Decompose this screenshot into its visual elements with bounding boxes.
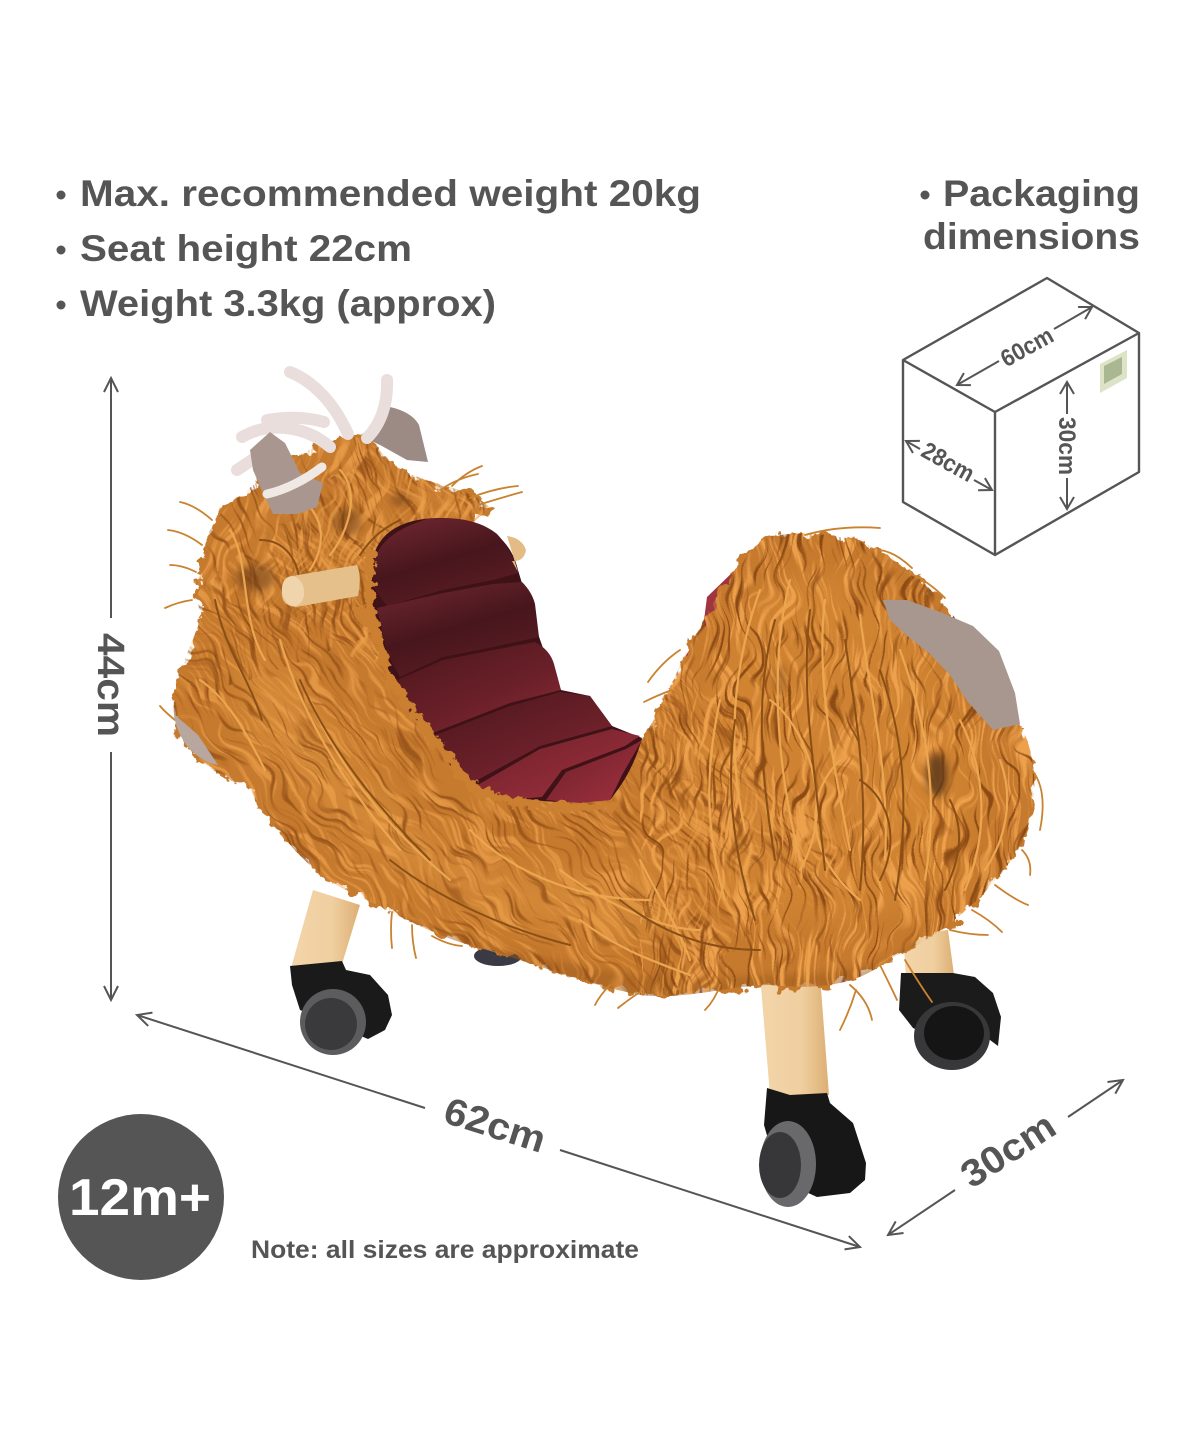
width dimension arrow: [888, 1080, 1123, 1235]
specifications list: Weight 3.3kg (approx): [80, 283, 496, 324]
tail patch: [883, 600, 1020, 730]
front leg and caster: [290, 890, 392, 1055]
stray edge wisps: [160, 466, 1043, 1030]
packaging box diagram: 60cm: [996, 322, 1058, 373]
length dimension arrow: [137, 1015, 860, 1247]
specifications list: [56, 173, 701, 324]
far ear: [363, 407, 428, 462]
packaging dimensions heading: [920, 173, 1140, 257]
hidden centre wheel: [474, 946, 522, 966]
near rear leg and caster: [759, 975, 866, 1207]
width dimension arrow: 30cm: [953, 1105, 1064, 1197]
antlers and near ear: [237, 372, 387, 514]
packaging dimensions heading: Packaging: [943, 173, 1140, 214]
wooden handlebar pegs: [280, 536, 526, 608]
specifications list: Seat height 22cm: [80, 228, 412, 269]
fur fringe over seat edge: [360, 552, 612, 808]
rear seat edge: [680, 548, 768, 670]
ribbed maroon seat: [371, 518, 642, 803]
packaging dimensions heading: dimensions: [923, 216, 1140, 257]
back leg and caster: [899, 930, 1001, 1070]
height dimension arrow: 44cm: [89, 633, 131, 737]
age badge: [58, 1114, 224, 1280]
highland cow ride-on toy: [159, 366, 1044, 1207]
size note: Note: all sizes are approximate: [251, 1236, 639, 1264]
muzzle: [174, 714, 218, 765]
packaging box diagram: 28cm: [917, 437, 979, 488]
fur strand texture: [174, 437, 1034, 996]
length dimension arrow: 62cm: [439, 1090, 551, 1162]
shaggy fur body: [174, 437, 1034, 996]
packaging box diagram: 30cm: [1053, 417, 1080, 475]
age badge: 12m+: [69, 1169, 211, 1227]
specifications list: Max. recommended weight 20kg: [80, 173, 701, 214]
long fur strands: [200, 470, 1007, 975]
packaging box diagram: [903, 278, 1139, 555]
